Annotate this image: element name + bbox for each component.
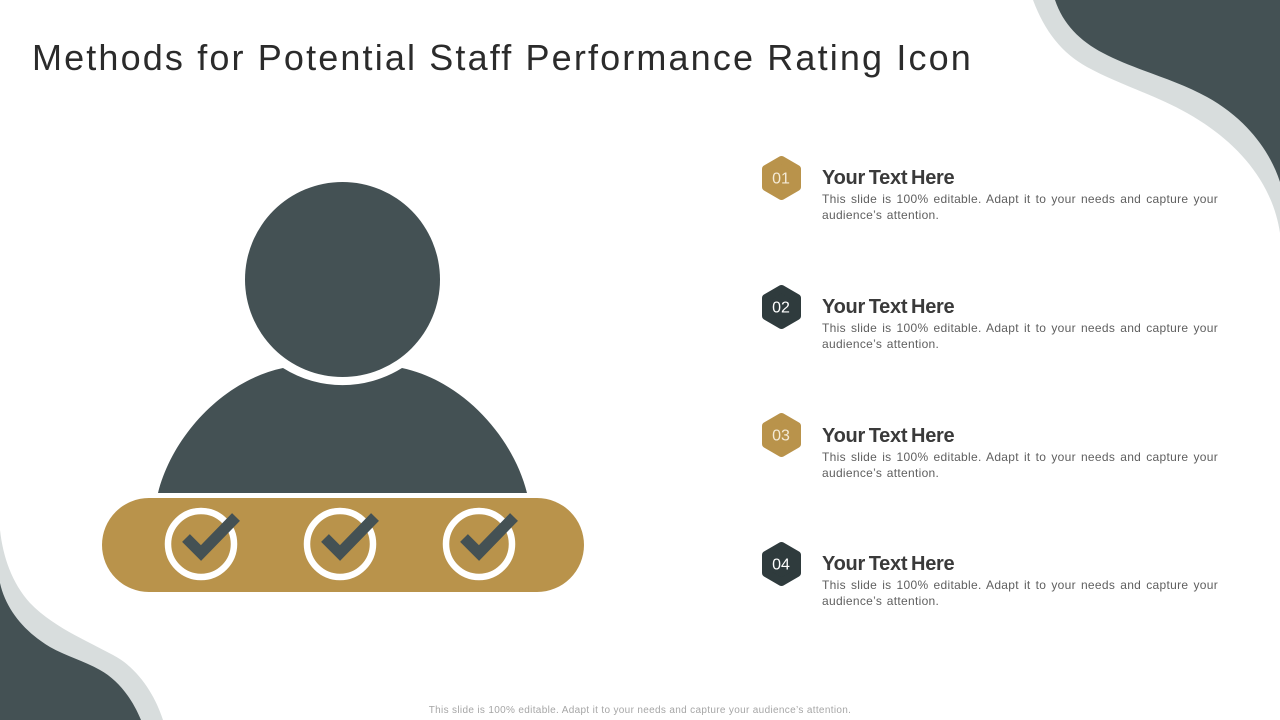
title: Methods for Potential Staff Performance Rating Icon	[32, 37, 973, 78]
check badge 3	[446, 511, 514, 577]
text block 04	[822, 552, 1218, 608]
rating bar	[102, 498, 584, 592]
text block 02: This slide is 100% editable. Adapt it to your needs and capture your audience’s attention.	[822, 321, 1218, 351]
hexagon 03: 03	[772, 428, 790, 444]
bottom-left dark wave	[0, 583, 141, 720]
text block 02: Your Text Here	[822, 296, 954, 318]
hexagon 01	[766, 160, 797, 196]
footer note: This slide is 100% editable. Adapt it to your needs and capture your audience’s attention.	[429, 705, 851, 716]
text block 01	[822, 166, 1218, 222]
bottom-left light wave	[0, 530, 163, 720]
hexagon 04	[766, 546, 797, 582]
hexagon 02	[766, 289, 797, 325]
text block 04: This slide is 100% editable. Adapt it to your needs and capture your audience’s attention.	[822, 578, 1218, 608]
text block 03	[822, 424, 1218, 480]
text block 04: Your Text Here	[822, 552, 954, 574]
text block 02	[822, 296, 1218, 351]
person body	[158, 368, 527, 493]
text block 01: Your Text Here	[822, 166, 954, 188]
hexagon 02: 02	[772, 300, 790, 316]
person head	[245, 182, 440, 377]
icon: staff person with rating bar	[102, 182, 584, 592]
text block 03: This slide is 100% editable. Adapt it to your needs and capture your audience’s attention.	[822, 450, 1218, 480]
top-right light wave	[1033, 0, 1280, 233]
text block 01: This slide is 100% editable. Adapt it to your needs and capture your audience’s attention.	[822, 192, 1218, 222]
text block 03: Your Text Here	[822, 424, 954, 446]
hexagon 03	[766, 417, 797, 453]
top-right dark wave	[1055, 0, 1280, 182]
check badge 1	[168, 511, 236, 577]
hexagon 04: 04	[772, 556, 790, 574]
check badge 2	[307, 511, 375, 577]
hexagon 01: 01	[772, 170, 790, 188]
